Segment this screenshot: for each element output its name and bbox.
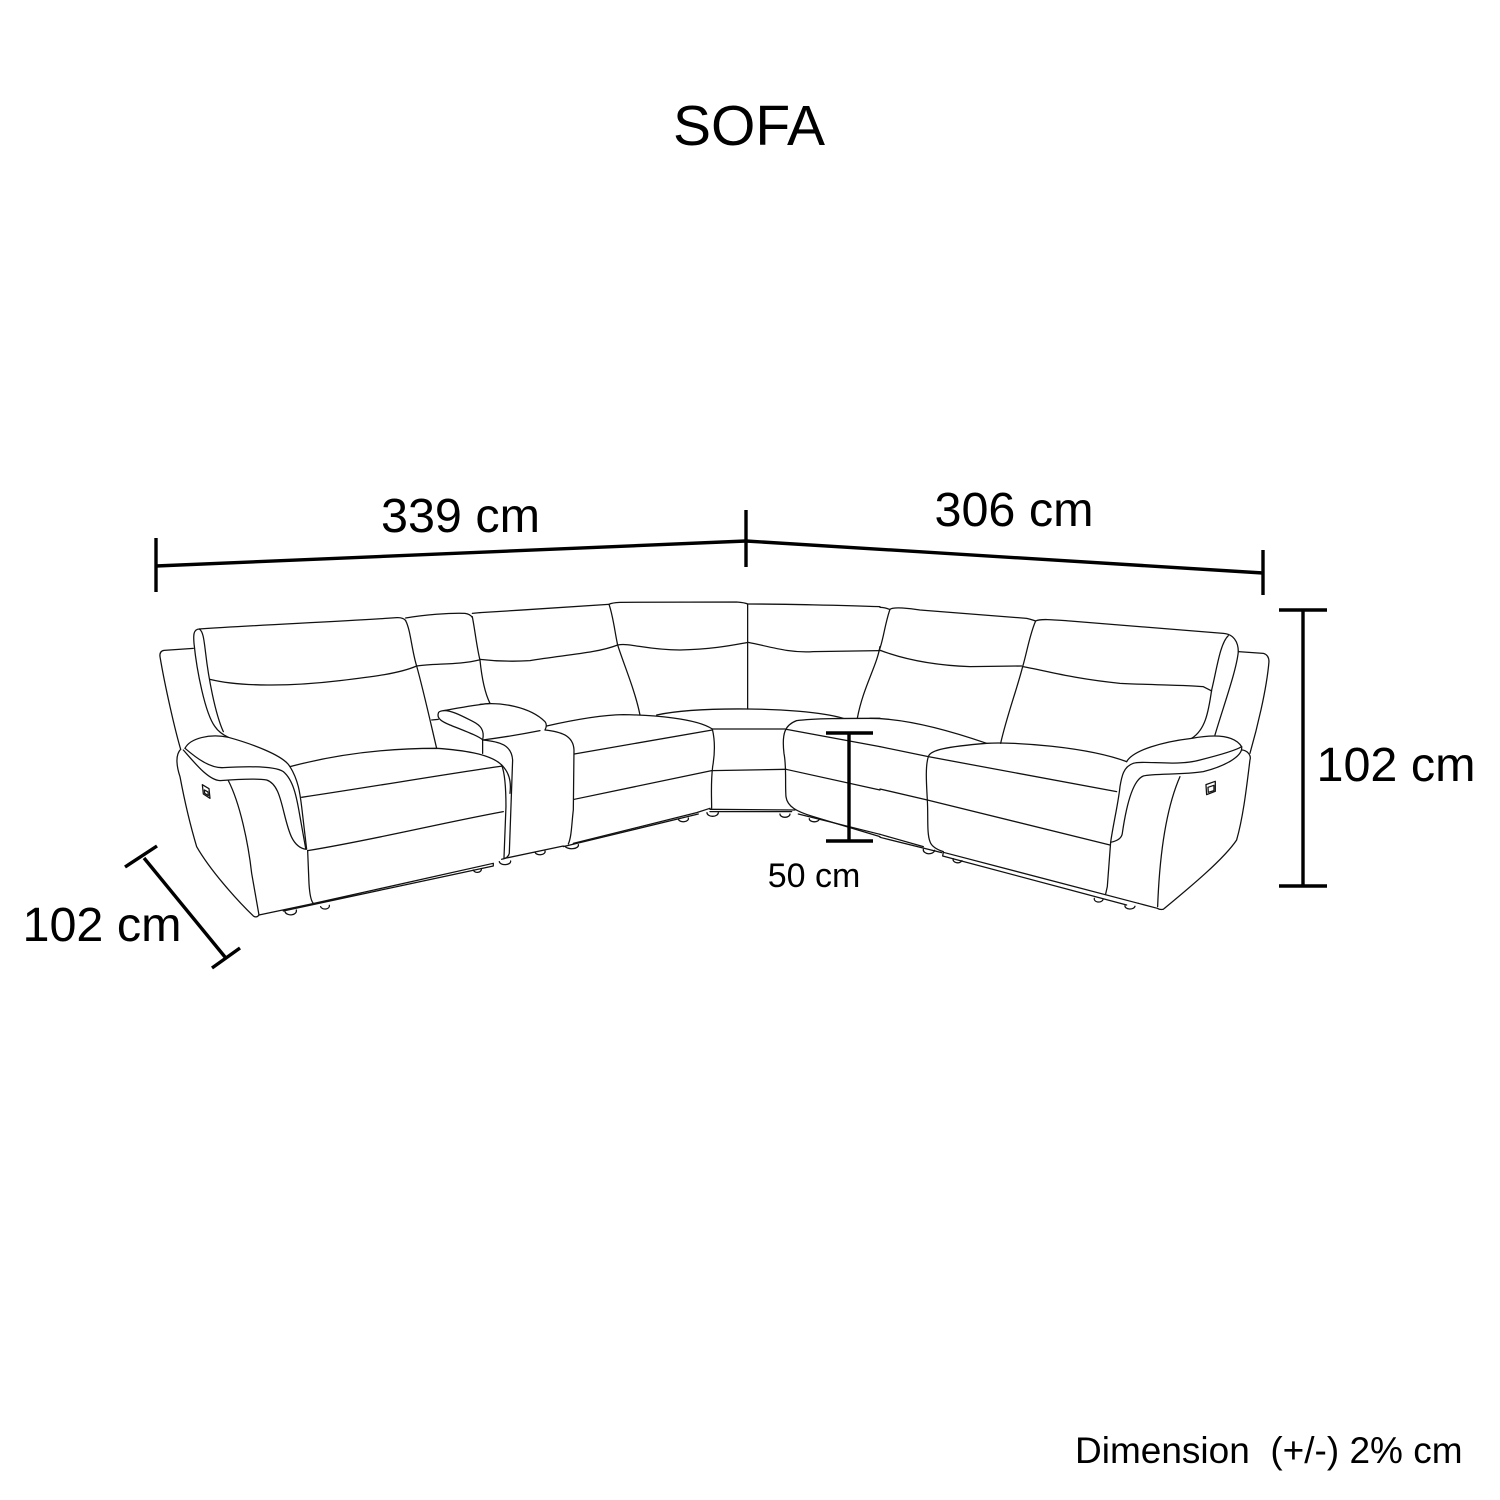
left recliner module [160,618,511,917]
dimension: 102 cm depth [22,846,240,968]
tolerance note: Dimension (+/-) 2% cm [1075,1430,1463,1471]
dimension: 339 cm width: 339 cm [381,489,540,543]
dimension: 102 cm depth: 102 cm [22,898,182,952]
dimension: 306 cm width: 306 cm [934,483,1094,537]
console module [406,613,540,859]
title: SOFA [673,94,825,158]
dimension: 339 cm width [156,489,746,592]
centre modules [480,602,880,858]
dimension: 102 cm height: 102 cm [1316,738,1476,792]
dimension: 50 cm seat height: 50 cm [768,857,860,895]
sofa line drawing [160,602,1269,917]
dimension: 306 cm width [746,483,1263,595]
right recliner module [870,607,1269,909]
